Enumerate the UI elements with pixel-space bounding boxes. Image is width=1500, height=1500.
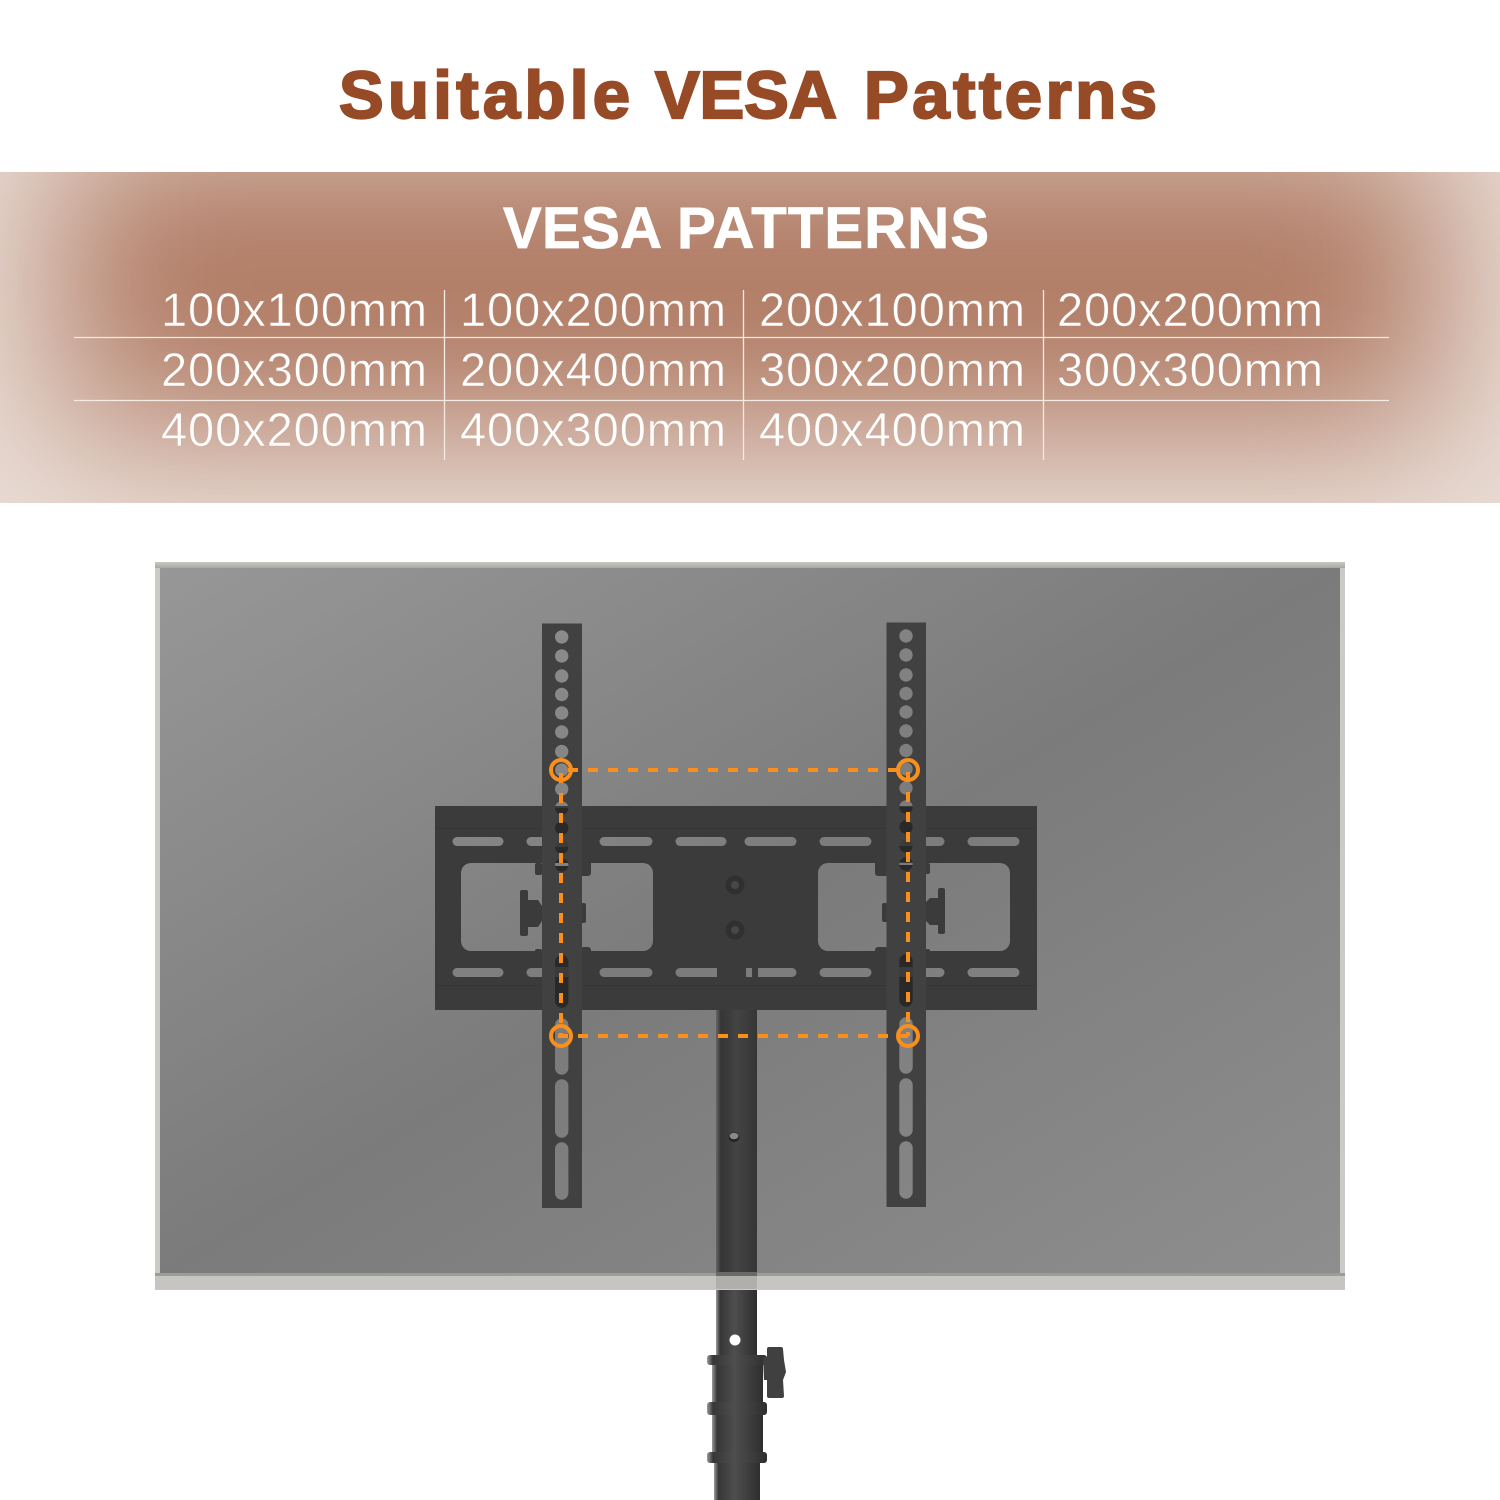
table values: 300x300mm xyxy=(1057,343,1323,396)
table values: 200x200mm xyxy=(1057,283,1323,336)
table values: 200x100mm xyxy=(759,283,1025,336)
pole screw xyxy=(728,1132,740,1142)
table values: 400x200mm xyxy=(161,403,427,456)
table heading: PATTERNS xyxy=(677,196,989,261)
pole lower section xyxy=(714,1460,760,1500)
pole hole xyxy=(730,1334,740,1346)
table values: 400x400mm xyxy=(759,403,1025,456)
title: Suitable xyxy=(339,58,630,133)
pole seen through the TV xyxy=(716,1010,757,1289)
table heading: VESA xyxy=(503,196,662,261)
TV back panel xyxy=(155,562,1345,1290)
collar rings xyxy=(707,1355,767,1365)
table values: 200x300mm xyxy=(161,343,427,396)
bracket nuts xyxy=(535,863,542,875)
title: VESA xyxy=(655,58,837,133)
table values: 100x100mm xyxy=(161,283,427,336)
height knob xyxy=(763,1347,786,1398)
title: Patterns xyxy=(864,58,1157,133)
table grid lines xyxy=(74,290,1389,460)
table values: 100x200mm xyxy=(460,283,726,336)
stand pole below the TV xyxy=(707,1288,786,1500)
mounting plate xyxy=(435,806,1037,1010)
table values: 400x300mm xyxy=(460,403,726,456)
dark backing seen through right bracket holes xyxy=(897,807,914,1010)
dark backing seen through left bracket holes xyxy=(553,808,570,1010)
centre bolts xyxy=(726,876,744,894)
table values: 200x400mm xyxy=(460,343,726,396)
table heading xyxy=(503,196,989,261)
left vertical bracket xyxy=(542,624,582,1208)
TV frame xyxy=(155,562,1345,1290)
table values xyxy=(161,283,1323,456)
table values: 300x200mm xyxy=(759,343,1025,396)
title xyxy=(339,58,1157,133)
right vertical bracket xyxy=(886,622,926,1207)
left tilt knob xyxy=(520,890,542,936)
collar xyxy=(712,1358,763,1463)
right tilt knob xyxy=(926,888,945,934)
panel: VESA patterns table xyxy=(0,140,1500,503)
panel background xyxy=(0,140,1500,503)
orange VESA hole pattern marker xyxy=(551,760,918,1046)
TV bottom edge xyxy=(155,1273,1345,1276)
plate fold lines xyxy=(435,828,1037,829)
TV screen xyxy=(160,568,1340,1274)
